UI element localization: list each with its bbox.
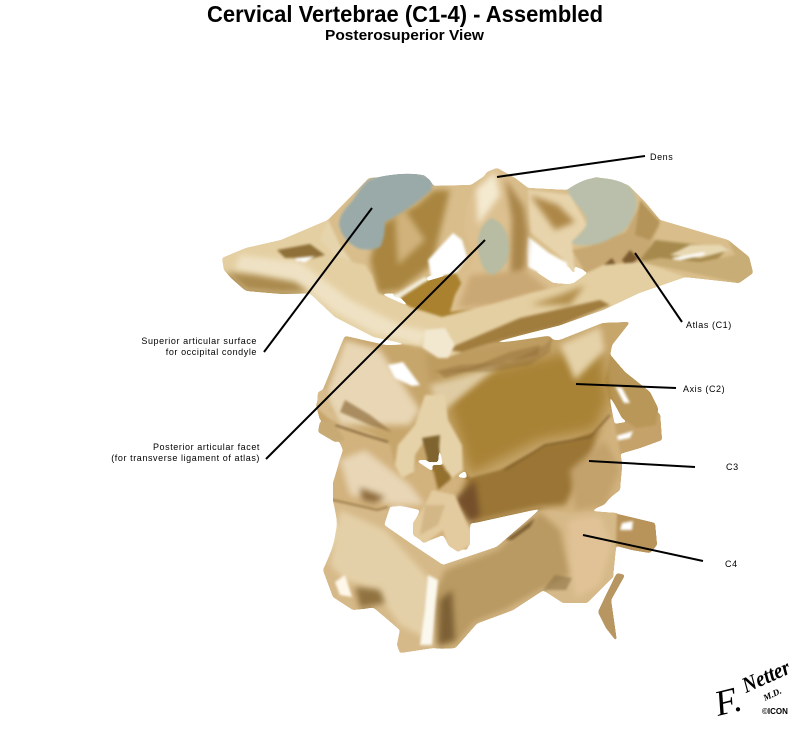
leader line: superior articular surface [264, 208, 372, 352]
leader line: posterior articular facet [266, 240, 485, 459]
label: axis: Axis (C2) [683, 384, 725, 394]
dens posterior articular facet [478, 218, 509, 275]
signature [709, 654, 794, 724]
leader line: axis [576, 384, 676, 388]
vertebra C2 [316, 322, 630, 478]
leader line: dens [497, 156, 645, 177]
signature: Netter [737, 654, 794, 698]
vertebra C4 [323, 500, 617, 653]
posterior arch of atlas [222, 220, 753, 358]
C2 bifid spinous process [395, 395, 463, 478]
signature: F. [709, 679, 746, 724]
label: superior articular surface: Superior articular surface [141, 336, 257, 346]
leader line: atlas [635, 253, 682, 322]
atlas C1 posterior part: lateral masses and anterior arch [310, 168, 753, 318]
icon: white gaps of vertebral foramen [428, 233, 467, 276]
signature: M.D. [761, 686, 783, 703]
subtitle: Posterosuperior View [325, 27, 484, 44]
signature: ©ICON [762, 707, 788, 716]
title: Cervical Vertebrae (C1-4) - Assembled [207, 1, 603, 27]
C3 bifid spinous process [413, 490, 470, 552]
label: posterior articular facet: (for transverse ligament of atlas) [111, 453, 260, 463]
label: posterior articular facet: Posterior articular facet [153, 442, 260, 452]
left superior articular surface [339, 174, 432, 250]
pitted ridge of axis [432, 338, 552, 372]
label: C3: C3 [726, 462, 739, 472]
illustration: assembled cervical vertebrae [222, 168, 753, 653]
label: superior articular surface [141, 336, 257, 357]
leader line: C4 [583, 535, 703, 561]
label: C4: C4 [725, 559, 738, 569]
dens of axis [450, 168, 575, 312]
leader line: C3 [589, 461, 695, 467]
vertebra C3 [330, 412, 622, 552]
label: posterior articular facet [111, 442, 260, 463]
title [207, 1, 603, 44]
label: superior articular surface: for occipital condyle [166, 347, 257, 357]
label: dens: Dens [650, 152, 673, 162]
right superior articular surface [567, 178, 637, 245]
label: atlas: Atlas (C1) [686, 320, 732, 330]
back processes on right side [598, 350, 662, 642]
